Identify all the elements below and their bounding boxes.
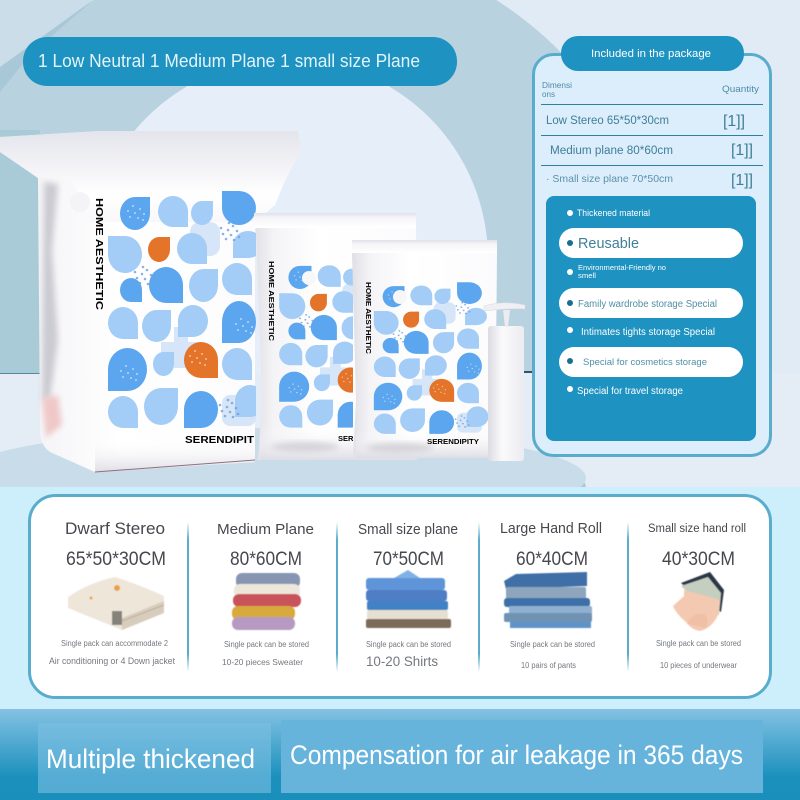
callout: air leakage compensation: Compensation for air leakage in 365 days: [290, 740, 743, 770]
callout: air leakage compensation: [281, 720, 763, 793]
small vacuum bag: [352, 240, 497, 458]
table row: medium plane: Medium plane 80*60cm: [550, 145, 673, 157]
feature: intimates: Intimates tights storage Special: [581, 327, 715, 338]
feature: environmental: smell: [578, 271, 596, 280]
size: dwarf stereo: 65*50*30CM: [66, 549, 166, 570]
table row: low stereo: Low Stereo 65*50*30cm: [546, 115, 669, 127]
brand text: SERENDIPIT: [185, 434, 255, 446]
table header: [542, 80, 759, 99]
valve: [393, 290, 407, 304]
large vacuum bag: [0, 131, 301, 472]
table row: small plane: [546, 172, 753, 189]
size: small plane: Small size plane: [358, 522, 458, 538]
feature: family wardrobe: Family wardrobe storage Special: [578, 299, 717, 310]
table row: medium plane: [550, 142, 753, 159]
size: medium plane: 80*60CM: [230, 549, 302, 570]
print pattern: [108, 191, 265, 428]
table header: ons: [542, 89, 555, 99]
size: small hand roll: Single pack can be stored: [656, 639, 741, 648]
size: dwarf stereo: [49, 519, 175, 667]
size: large hand roll: 60*40CM: [516, 549, 588, 570]
size: large hand roll: 10 pairs of pants: [521, 661, 576, 670]
table row: low stereo: [546, 113, 745, 130]
table row: small plane: · Small size plane 70*50cm: [546, 173, 673, 185]
title banner: [23, 37, 457, 86]
brand text vertical: HOME AESTHETIC: [267, 261, 276, 342]
feature: thickened: Thickened material: [577, 208, 650, 218]
feature: reusable: [559, 228, 743, 258]
package heading: Included in the package: [591, 48, 711, 60]
size: small plane: [358, 522, 458, 669]
feature: cosmetics: [559, 347, 743, 377]
bottom banner: [0, 709, 800, 800]
medium vacuum bag: [254, 213, 417, 460]
size: dwarf stereo: Air conditioning or 4 Down jacket: [49, 656, 175, 667]
table header: Quantity: [722, 84, 759, 95]
feature: environmental: Environmental-Friendly no: [578, 263, 666, 272]
feature: family wardrobe: [559, 288, 743, 318]
brand text: SER: [338, 434, 354, 443]
feature: cosmetics: Special for cosmetics storage: [583, 357, 707, 368]
size: small plane: Single pack can be stored: [366, 640, 451, 649]
icon: folded underwear: [673, 572, 724, 631]
print pattern: [374, 282, 488, 434]
package heading: [561, 36, 744, 71]
size section background: [0, 487, 800, 709]
feature list box: [546, 196, 756, 441]
size: large hand roll: Single pack can be stored: [510, 640, 595, 649]
size: small plane: 10-20 Shirts: [366, 654, 438, 669]
size: dwarf stereo: Dwarf Stereo: [65, 519, 165, 538]
size: medium plane: [217, 521, 314, 667]
size: large hand roll: Large Hand Roll: [500, 520, 602, 537]
table row: low stereo: [1]]: [723, 113, 745, 130]
panel: package contents: [534, 36, 770, 456]
size: small hand roll: 40*30CM: [662, 549, 735, 570]
feature: travel: Special for travel storage: [577, 386, 683, 397]
table row: medium plane: [1]]: [731, 142, 753, 159]
callout: multiple thickened: Multiple thickened: [46, 744, 255, 774]
size: small plane: 70*50CM: [373, 549, 444, 570]
size: dwarf stereo: Single pack can accommodate 2: [61, 639, 169, 648]
icon: folded quilt: [68, 577, 164, 630]
size: medium plane: Single pack can be stored: [224, 640, 309, 649]
print pattern: [279, 265, 353, 428]
callout: multiple thickened: [38, 723, 271, 793]
size: small hand roll: Small size hand roll: [648, 523, 746, 535]
table row: small plane: [1]]: [731, 172, 753, 189]
size: medium plane: 10-20 pieces Sweater: [222, 657, 303, 667]
brand text vertical: HOME AESTHETIC: [93, 198, 104, 310]
panel: size cards: [30, 496, 770, 698]
brand text: SERENDIPITY: [427, 437, 479, 446]
table header: Dimensi: [542, 80, 572, 90]
title banner: 1 Low Neutral 1 Medium Plane 1 small size Plane: [38, 51, 420, 71]
feature: environmental: [567, 263, 666, 280]
icon: stacked jeans: [504, 572, 592, 628]
icon: stacked sweaters: [232, 573, 301, 630]
size: medium plane: Medium Plane: [217, 521, 314, 538]
icon: hand pump: [484, 303, 525, 461]
feature: reusable: Reusable: [578, 235, 639, 252]
icon: stacked shirts: [366, 570, 451, 628]
size: small hand roll: 10 pieces of underwear: [660, 661, 737, 670]
valve: [302, 271, 316, 285]
size: large hand roll: [500, 520, 602, 670]
brand text vertical: HOME AESTHETIC: [364, 282, 371, 354]
valve: [70, 192, 90, 212]
size: small hand roll: [648, 523, 746, 670]
